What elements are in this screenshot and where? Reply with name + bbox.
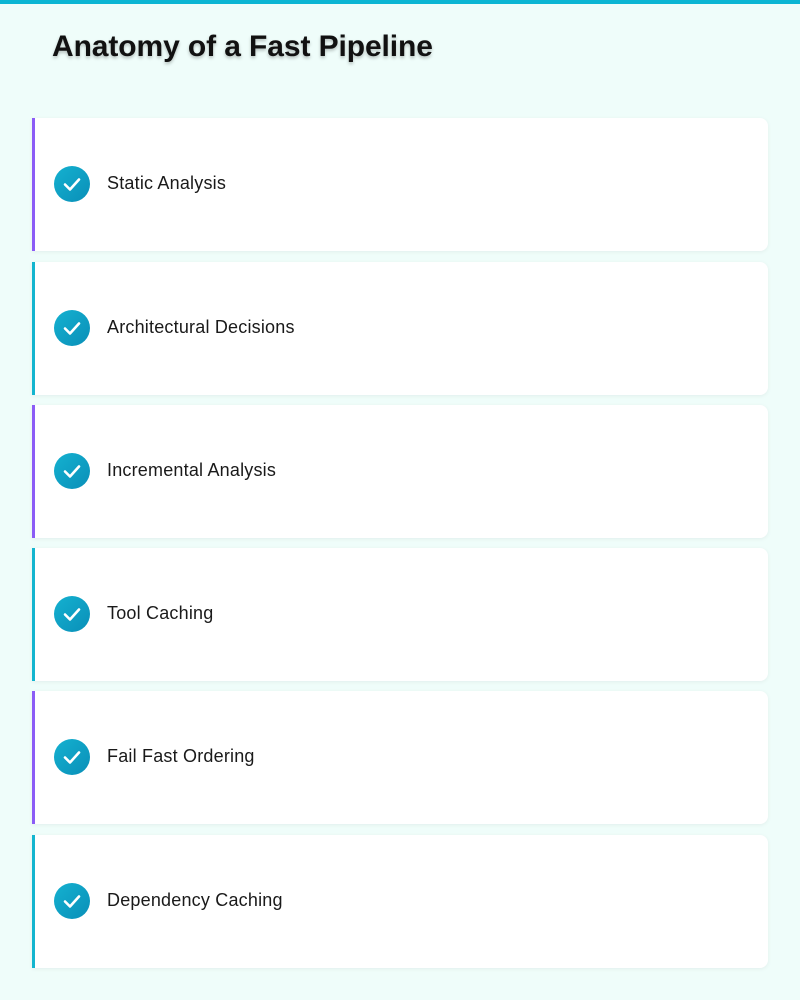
card: Fail Fast Ordering xyxy=(32,691,768,824)
card: Tool Caching xyxy=(32,548,768,681)
icon: check xyxy=(54,166,90,202)
icon: check xyxy=(54,310,90,346)
card: Static Analysis xyxy=(32,118,768,251)
label: Dependency Caching xyxy=(107,890,283,910)
label: Static Analysis xyxy=(107,173,226,193)
icon: check xyxy=(54,596,90,632)
card: Incremental Analysis xyxy=(32,405,768,538)
icon: check xyxy=(54,739,90,775)
label: Architectural Decisions xyxy=(107,317,295,337)
label: Tool Caching xyxy=(107,603,213,623)
card: Dependency Caching xyxy=(32,835,768,968)
icon: check xyxy=(54,883,90,919)
label: Incremental Analysis xyxy=(107,460,276,480)
title: Anatomy of a Fast Pipeline xyxy=(52,30,433,63)
card: Architectural Decisions xyxy=(32,262,768,395)
label: Fail Fast Ordering xyxy=(107,746,255,766)
icon: check xyxy=(54,453,90,489)
